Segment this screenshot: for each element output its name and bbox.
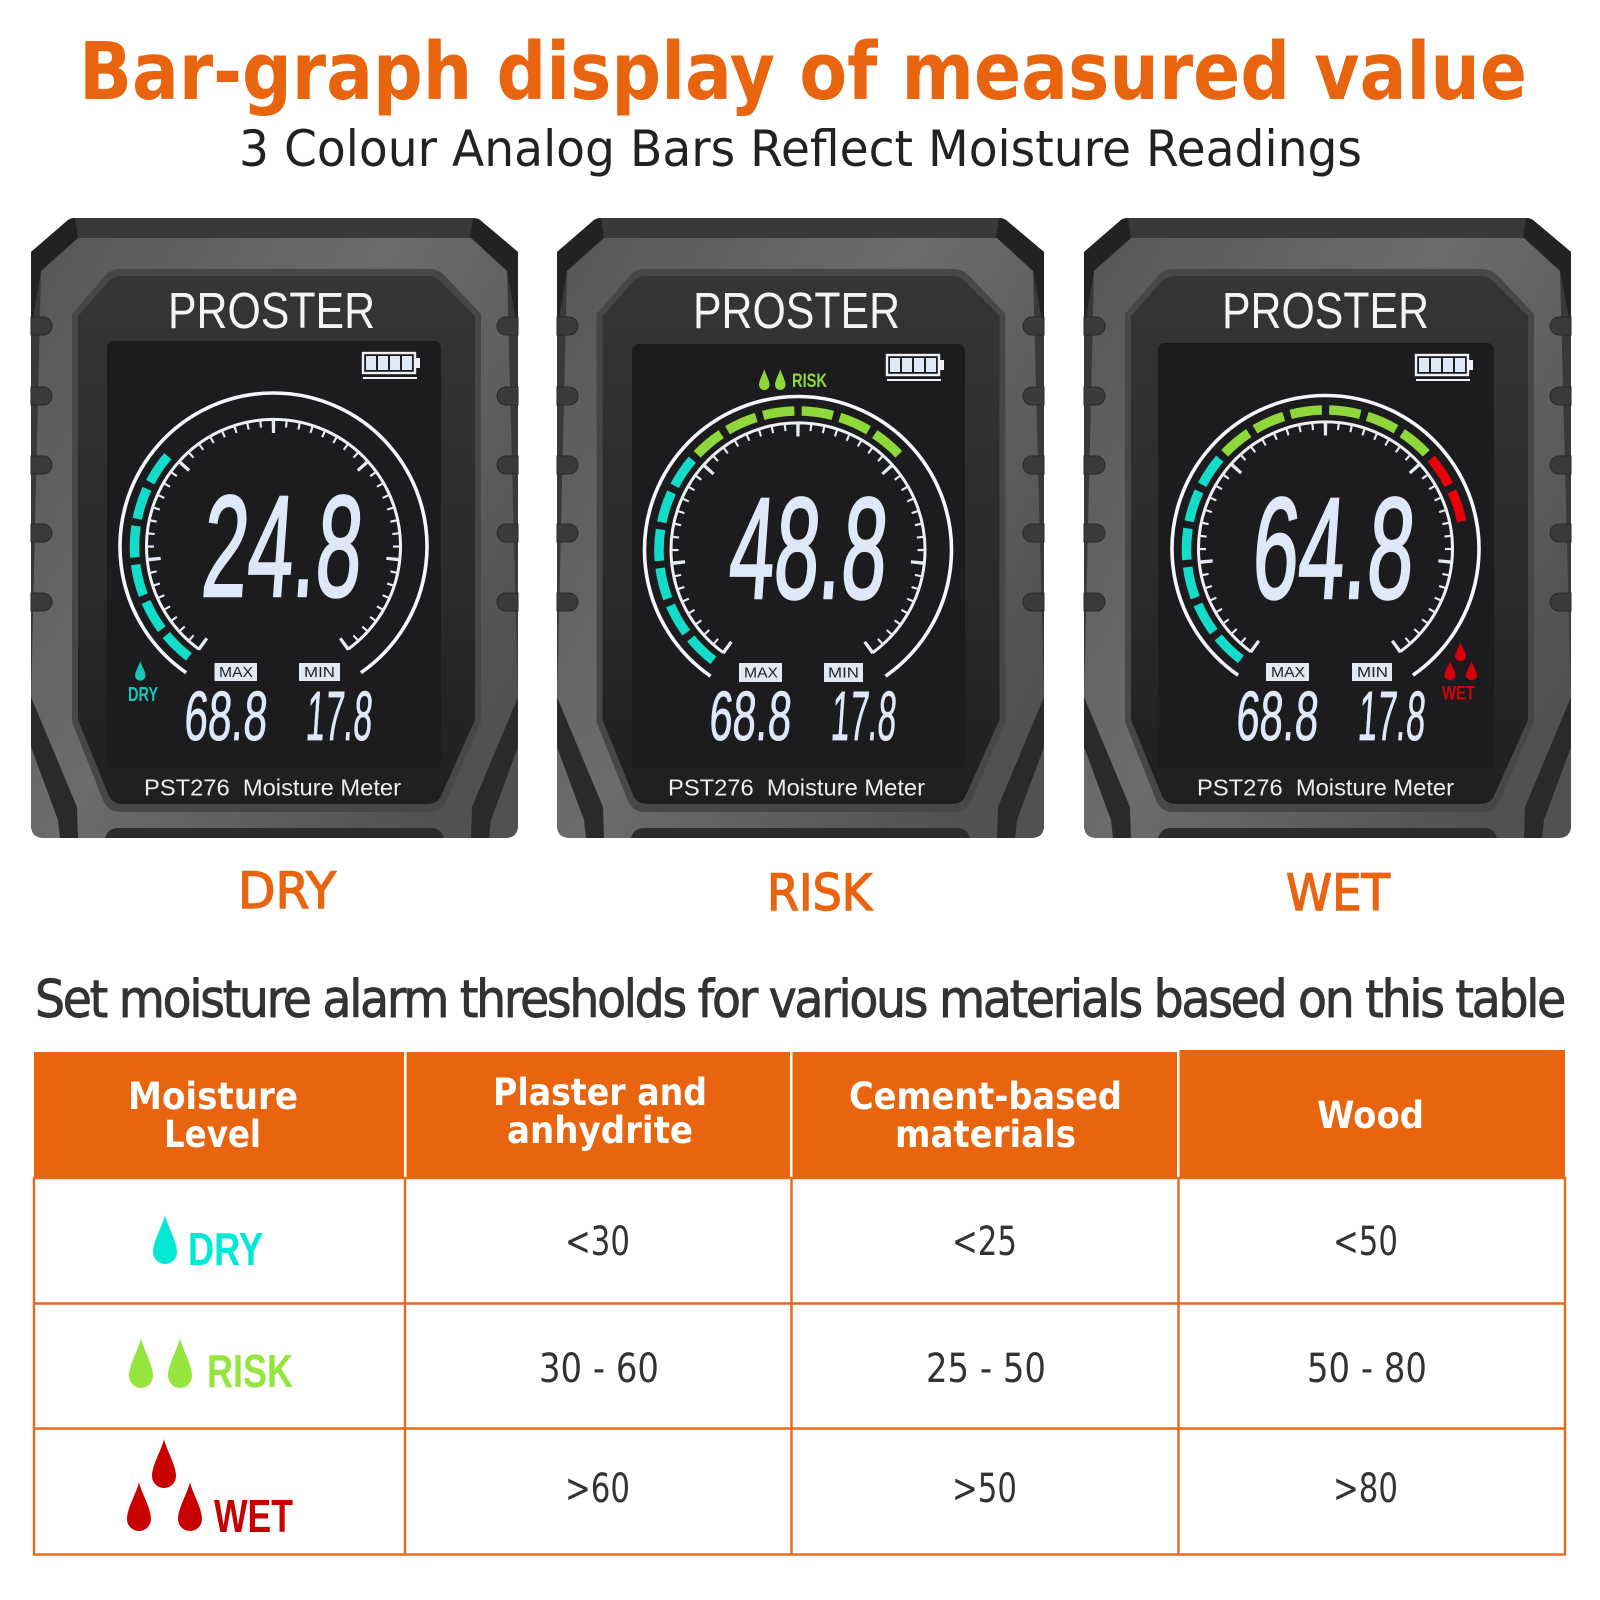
- risk indicator: [759, 369, 827, 392]
- row: dry values: <30: [565, 1219, 630, 1265]
- row: dry values: <50: [1333, 1219, 1398, 1265]
- table: [34, 1050, 1565, 1554]
- max label: MAX: [219, 665, 253, 681]
- row: wet values: >60: [565, 1466, 630, 1512]
- brand label: PROSTER: [168, 282, 375, 339]
- risk indicator: RISK: [792, 371, 827, 392]
- row: risk values: 30 - 60: [539, 1346, 659, 1392]
- row: risk values: [539, 1346, 1427, 1392]
- dry legend: DRY: [188, 1223, 263, 1275]
- gauge with cyan bars: [120, 393, 427, 673]
- risk legend: [129, 1338, 293, 1397]
- max label: [1266, 663, 1309, 681]
- model label: PST276 Moisture Meter: [1197, 774, 1454, 800]
- brand label: PROSTER: [1222, 282, 1429, 339]
- header: moisture level: Moisture: [128, 1075, 298, 1118]
- subtitle: 3 Colour Analog Bars Reflect Moisture Readings: [239, 120, 1362, 178]
- min reading: 17.8: [1356, 677, 1428, 755]
- device panel: WET: [1084, 218, 1571, 838]
- LCD screen: WET: [1158, 343, 1494, 769]
- header: cement-based materials: [849, 1075, 1122, 1156]
- header: plaster and anhydrite: [493, 1071, 707, 1152]
- min label: MIN: [304, 665, 335, 681]
- main reading: 48.8: [725, 467, 893, 629]
- header: plaster and anhydrite: Plaster and: [493, 1071, 707, 1114]
- header: cement-based materials: materials: [895, 1113, 1076, 1156]
- brand label: PROSTER: [693, 282, 900, 339]
- min label: MIN: [1357, 665, 1388, 681]
- battery icon: [363, 353, 420, 379]
- main reading: 24.8: [198, 465, 368, 627]
- model label: PST276 Moisture Meter: [144, 774, 401, 800]
- header: cement-based materials: Cement-based: [849, 1075, 1122, 1118]
- min label: MIN: [828, 666, 859, 682]
- min label: [824, 663, 863, 682]
- max reading: 68.8: [1234, 677, 1321, 755]
- model label: PST276 Moisture Meter: [668, 774, 925, 800]
- max label: [739, 663, 782, 682]
- row: wet values: >80: [1333, 1466, 1398, 1512]
- LCD screen: DRY: [107, 341, 441, 769]
- device panel: RISK: [557, 218, 1044, 838]
- row: dry values: <25: [952, 1219, 1017, 1265]
- wet legend: [127, 1439, 293, 1542]
- row: wet values: [565, 1466, 1398, 1512]
- max reading: 68.8: [707, 677, 794, 755]
- device panel: DRY: [31, 218, 518, 838]
- max reading: 68.8: [182, 677, 270, 755]
- table grid: [34, 1178, 1565, 1554]
- dry indicator: DRY: [128, 684, 158, 706]
- device panel: RISK: 17.8: [829, 677, 899, 755]
- label: RISK: RISK: [767, 864, 873, 922]
- main reading: 64.8: [1248, 467, 1420, 629]
- header: moisture level: Level: [164, 1113, 261, 1156]
- header: wood: Wood: [1317, 1094, 1424, 1137]
- row: risk values: 50 - 80: [1307, 1346, 1427, 1392]
- battery icon: [1416, 355, 1473, 381]
- header: plaster and anhydrite: anhydrite: [507, 1109, 693, 1152]
- dry indicator: [128, 661, 158, 706]
- row: wet values: >50: [952, 1466, 1017, 1512]
- header: moisture level: [128, 1075, 298, 1156]
- wet indicator: [1442, 642, 1477, 704]
- risk legend: RISK: [207, 1345, 293, 1397]
- wet legend: WET: [214, 1490, 293, 1542]
- dry legend: [153, 1215, 263, 1275]
- wet indicator: WET: [1442, 684, 1475, 704]
- label: WET: WET: [1286, 864, 1390, 922]
- gauge with cyan, green and red bars: [1172, 396, 1479, 675]
- gauge with cyan and green bars: [644, 397, 952, 676]
- row: risk values: 25 - 50: [926, 1346, 1046, 1392]
- max label: MAX: [1271, 665, 1305, 681]
- LCD screen: RISK: [632, 344, 965, 769]
- label: DRY: DRY: [238, 862, 336, 920]
- battery icon: [887, 355, 944, 381]
- max label: [214, 663, 257, 681]
- min reading: 17.8: [304, 677, 375, 755]
- min label: [1352, 663, 1392, 681]
- row: dry values: [565, 1219, 1398, 1265]
- min label: [299, 663, 340, 681]
- table header band: [34, 1050, 1565, 1178]
- max label: MAX: [744, 666, 778, 682]
